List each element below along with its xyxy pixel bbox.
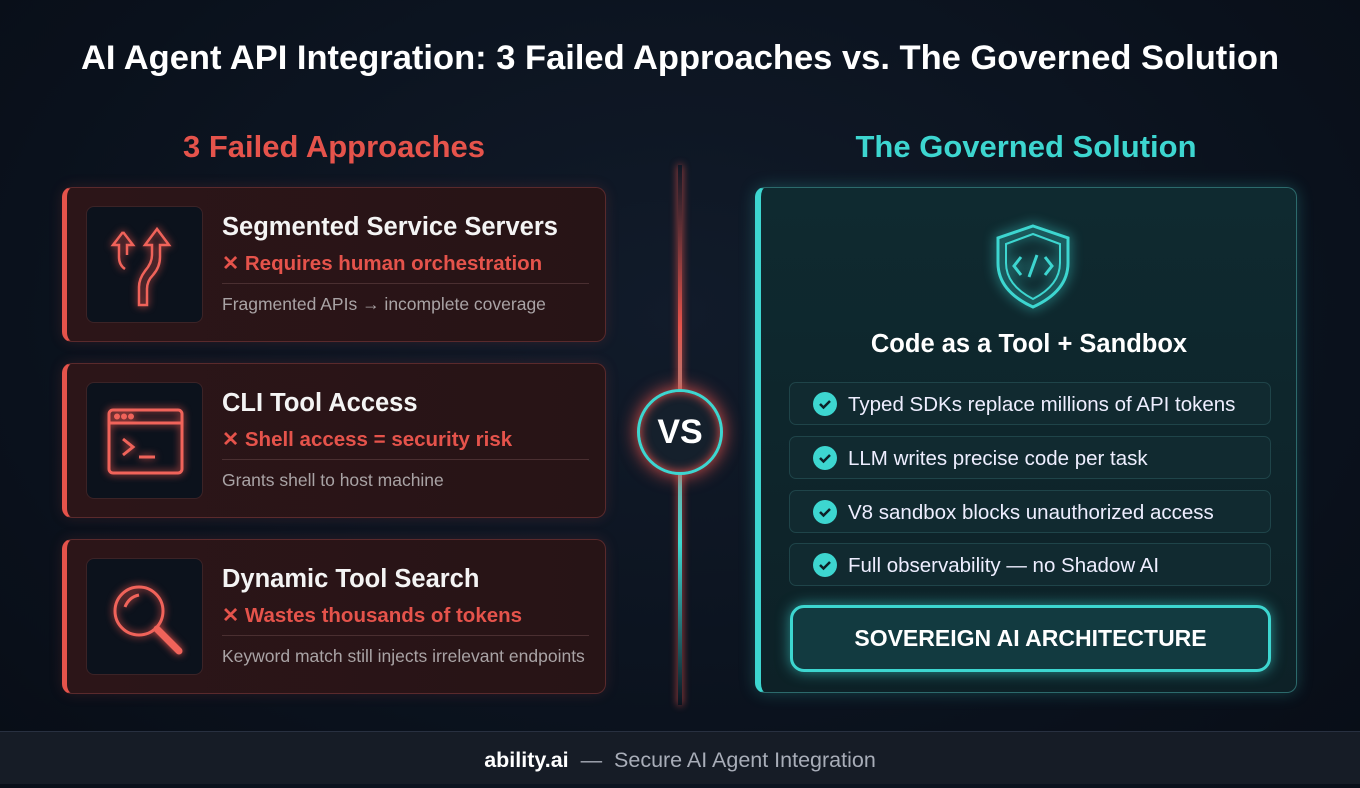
VS badge [637, 389, 723, 475]
icon: magnifier [86, 558, 203, 675]
card: CLI tool access: Grants shell to host machine [222, 470, 444, 490]
heading: failed approaches: 3 Failed Approaches [183, 129, 485, 164]
solution title: Code as a Tool + Sandbox [871, 330, 1187, 358]
checklist item 4: Full observability — no Shadow AI [848, 554, 1159, 577]
card: dynamic tool search: Dynamic Tool Search [222, 565, 479, 593]
card: segmented service servers: Fragmented APIs → incomplete coverage [222, 294, 546, 314]
badge: sovereign AI architecture [790, 605, 1271, 672]
card: segmented service servers: ✕ Requires human orchestration [222, 252, 542, 275]
checklist item 2 [789, 436, 1271, 479]
footer [0, 731, 1360, 784]
card: segmented service servers [62, 187, 606, 342]
panel: governed solution [755, 187, 1297, 693]
card: segmented service servers: Segmented Service Servers [222, 213, 558, 241]
checklist item 2: LLM writes precise code per task [848, 447, 1148, 470]
footer: ability.ai — Secure AI Agent Integration [484, 748, 876, 772]
icon: split arrows [86, 206, 203, 323]
card: CLI tool access: ✕ Shell access = security risk [222, 428, 512, 451]
card: CLI tool access: CLI Tool Access [222, 389, 418, 417]
title: AI Agent API Integration: 3 Failed Approaches vs. The Governed Solution [81, 39, 1279, 77]
checklist item 1 [789, 382, 1271, 425]
card: dynamic tool search: Keyword match still injects irrelevant endpoints [222, 646, 585, 666]
divider line with glow [678, 165, 682, 705]
checklist item 1: Typed SDKs replace millions of API tokens [848, 393, 1235, 416]
card: dynamic tool search [62, 539, 606, 694]
heading: governed solution: The Governed Solution [855, 129, 1196, 164]
icon: terminal [86, 382, 203, 499]
VS badge: VS [657, 413, 703, 451]
card: CLI tool access [62, 363, 606, 518]
card: dynamic tool search: ✕ Wastes thousands of tokens [222, 604, 522, 627]
icon: shield with code [988, 218, 1078, 316]
badge: sovereign AI architecture: SOVEREIGN AI ARCHITECTURE [854, 625, 1207, 651]
checklist item 3: V8 sandbox blocks unauthorized access [848, 501, 1214, 524]
checklist item 3 [789, 490, 1271, 533]
checklist item 4 [789, 543, 1271, 586]
